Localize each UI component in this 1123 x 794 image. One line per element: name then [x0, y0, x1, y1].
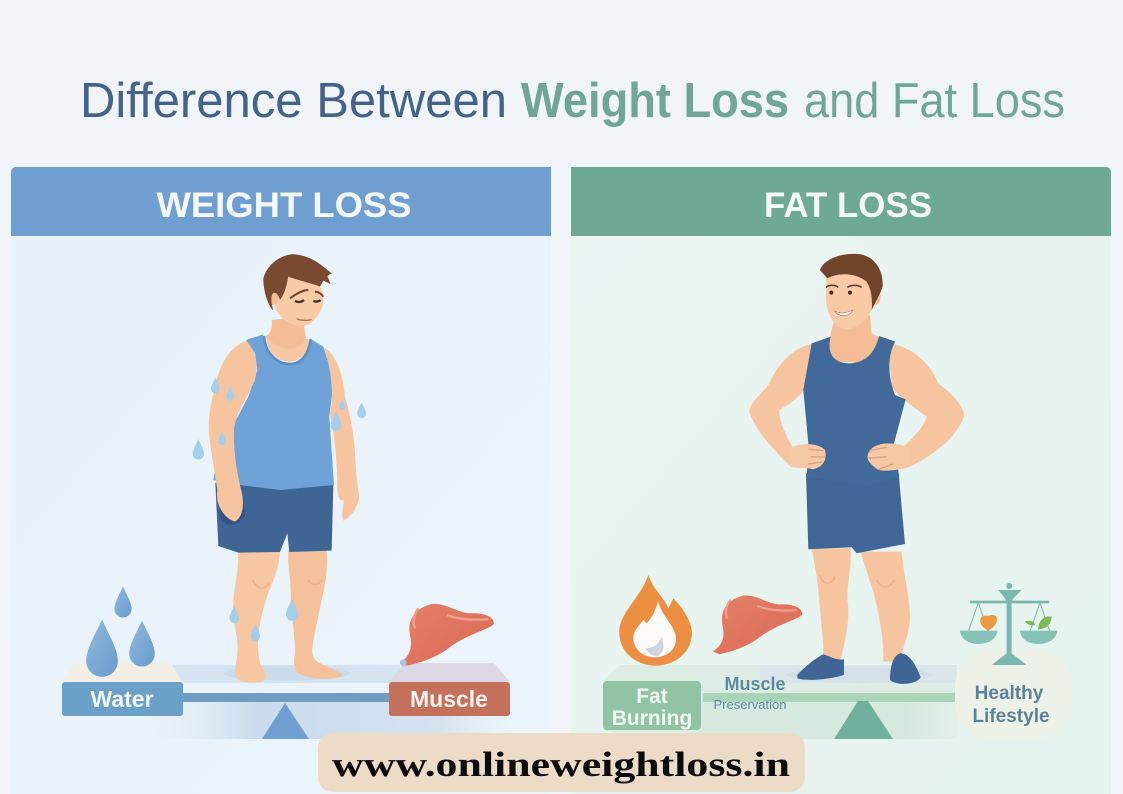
shorts — [215, 483, 333, 553]
muscle preservation label: Preservation — [714, 697, 786, 712]
figure: sad man with water loss — [193, 254, 366, 683]
face — [826, 273, 876, 329]
healthy lifestyle label — [972, 683, 1050, 727]
fat burning label — [603, 681, 701, 730]
floor shadow — [787, 667, 933, 683]
icon: water drops — [86, 586, 155, 677]
scale: fat burning to healthy lifestyle — [603, 650, 1073, 740]
tank top — [803, 336, 906, 486]
eyes and smile — [826, 285, 862, 287]
right arm — [324, 347, 359, 521]
fat burning label: Burning — [612, 707, 692, 730]
muscle label — [389, 682, 510, 716]
arms — [749, 343, 814, 467]
face — [275, 271, 323, 326]
muscle preservation label — [714, 674, 786, 712]
legs — [233, 550, 280, 683]
hair — [820, 254, 883, 310]
icon: flame — [619, 575, 692, 666]
weight loss header bar — [11, 167, 551, 236]
panel: fat loss — [571, 167, 1111, 794]
water label: Water — [90, 686, 154, 712]
title: Difference Between — [80, 74, 507, 128]
legs — [812, 548, 851, 662]
scale: water vs muscle — [62, 663, 510, 739]
icon: muscle preserved — [713, 596, 802, 654]
shoes — [797, 654, 844, 680]
icon: muscle — [400, 604, 494, 666]
muscle preservation label: Muscle — [724, 674, 786, 694]
figure: fit man — [749, 254, 964, 684]
neck — [266, 317, 306, 349]
weight loss heading: WEIGHT LOSS — [156, 186, 412, 225]
hair — [263, 254, 332, 311]
sad eyes and mouth — [290, 290, 323, 298]
website banner — [318, 733, 805, 792]
healthy lifestyle label: Healthy — [975, 683, 1044, 704]
healthy lifestyle label: Lifestyle — [972, 706, 1050, 727]
torso tank — [213, 334, 334, 490]
neck and chest — [828, 315, 878, 363]
fat loss header bar — [571, 167, 1111, 236]
title: Weight Loss — [521, 74, 789, 128]
panel: weight loss — [11, 167, 551, 794]
hands — [790, 443, 910, 471]
fat loss heading: FAT LOSS — [764, 186, 932, 225]
sweat drops — [193, 378, 366, 641]
title — [80, 74, 1065, 128]
icon: balance scale — [960, 583, 1057, 665]
floor shadow — [223, 666, 350, 681]
water label — [62, 682, 183, 716]
title: and Fat Loss — [804, 74, 1065, 128]
left arm — [209, 341, 257, 522]
muscle label: Muscle — [410, 686, 488, 712]
shorts — [806, 473, 905, 553]
fat burning label: Fat — [636, 685, 668, 708]
website banner: www.onlineweightloss.in — [332, 745, 790, 784]
